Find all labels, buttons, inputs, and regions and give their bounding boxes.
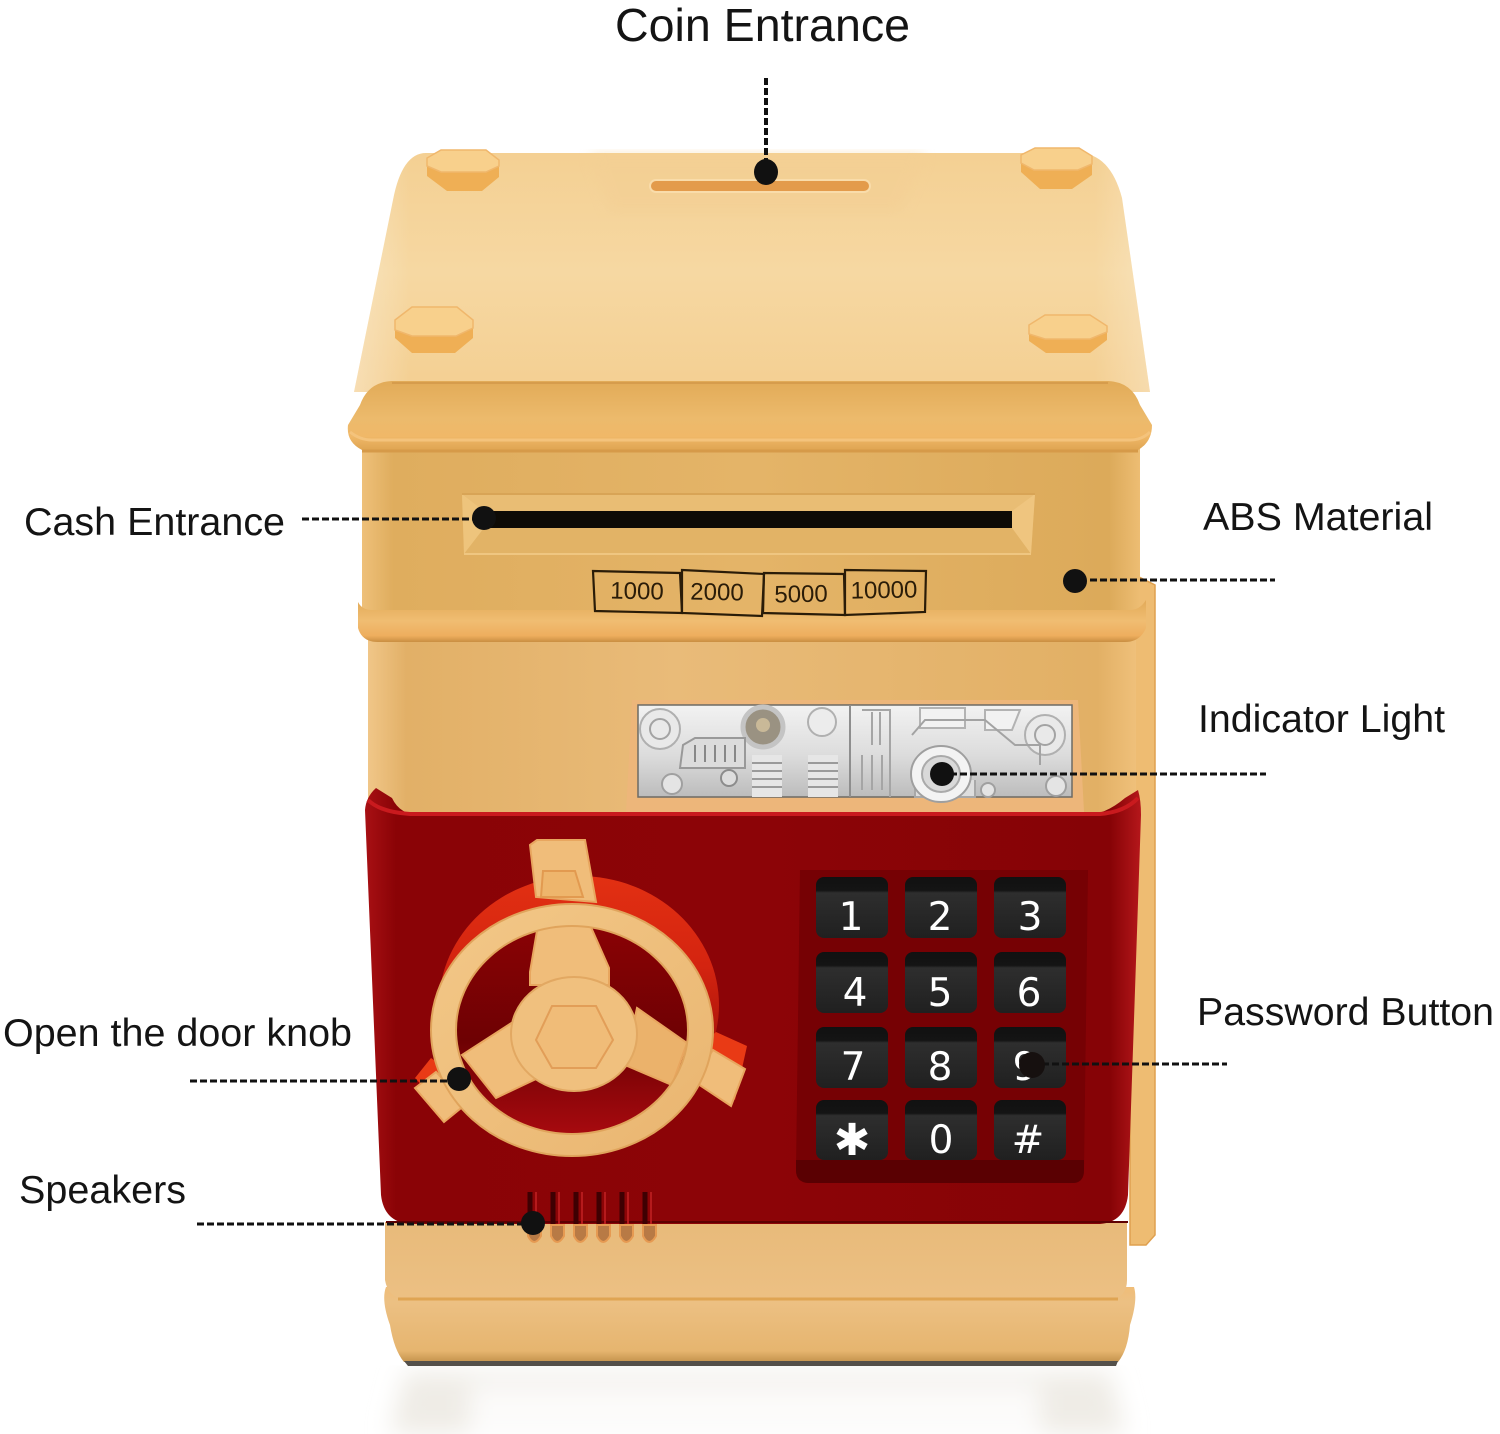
red door panel: [365, 788, 1141, 1224]
bolt top left: [427, 150, 499, 191]
upper gold body: [362, 445, 1140, 610]
label: Cash Entrance: [24, 501, 496, 544]
side door edge: [1130, 575, 1155, 1245]
coin bank product: [348, 148, 1155, 1366]
leader: Speakers: [197, 1222, 525, 1226]
banknote denomination labels: 10000: [850, 576, 918, 605]
silver mechanism detail: [640, 705, 1066, 802]
keys row one: 2: [928, 895, 952, 940]
label: ABS Material: ABS Material: [1203, 496, 1433, 539]
label: Coin Entrance: Coin Entrance: [615, 0, 910, 51]
label: Cash Entrance: Cash Entrance: [24, 501, 285, 544]
seam band: [358, 600, 1146, 642]
base plate: [384, 1287, 1135, 1366]
marker: Coin Entrance: [754, 159, 778, 185]
label: Indicator Light: Indicator Light: [1198, 698, 1445, 741]
keys row three: [816, 1027, 1066, 1090]
leader: ABS Material: [1090, 578, 1275, 582]
base body: [385, 1222, 1127, 1299]
banknote denomination labels: 2000: [690, 579, 744, 606]
marker: Cash Entrance: [472, 506, 496, 530]
keys row one: 3: [1018, 895, 1042, 940]
marker: Indicator Light: [930, 762, 954, 786]
keypad recess: [796, 870, 1088, 1183]
cash slot bezel: [462, 494, 1035, 554]
leader: Cash Entrance: [302, 518, 474, 520]
door knob: [415, 840, 747, 1156]
bolt bottom right: [1029, 315, 1107, 353]
keypad: [796, 870, 1088, 1183]
marker: ABS Material: [1063, 569, 1087, 593]
label: Open the door knob: [3, 1012, 471, 1091]
leader: Coin Entrance: [764, 78, 768, 170]
speaker vents: [528, 1192, 656, 1242]
knob outer tabs: [415, 1032, 747, 1122]
knob inner recess: [452, 924, 692, 1136]
label: Speakers: Speakers: [19, 1169, 186, 1212]
lower gold body: [368, 636, 1136, 836]
label: Coin Entrance: [615, 0, 910, 185]
keys row three: 8: [928, 1045, 952, 1090]
leader: Open the door knob: [190, 1080, 450, 1082]
keys row one: [816, 877, 1066, 940]
indicator panel: [626, 700, 1084, 812]
coin slot: [650, 180, 870, 192]
keys row four: #: [1012, 1118, 1044, 1163]
bolt top right: [1021, 148, 1092, 189]
keys row four: ✱: [834, 1115, 870, 1166]
keys row two: 5: [928, 971, 952, 1016]
banknote denomination labels: [593, 570, 926, 616]
label: Speakers: [19, 1169, 545, 1235]
keys row four: 0: [929, 1118, 953, 1163]
keys row four: [816, 1100, 1066, 1166]
leader: Indicator Light: [950, 772, 1266, 776]
keys row three: 7: [841, 1045, 865, 1090]
banknote denomination labels: 1000: [610, 578, 664, 605]
bolt bottom left: [395, 307, 473, 353]
label: ABS Material: [1063, 496, 1433, 593]
floor reflection: [390, 1372, 1125, 1434]
knob hub: [511, 977, 637, 1091]
keys row two: [816, 952, 1066, 1016]
label: Password Button: Password Button: [1197, 991, 1494, 1034]
knob spokes: [462, 840, 687, 1098]
marker: Password Button: [1019, 1052, 1045, 1078]
lid front band: [348, 381, 1152, 451]
label: Indicator Light: [930, 698, 1445, 786]
keys row one: 1: [839, 895, 863, 940]
banknote denomination labels: 5000: [774, 581, 828, 608]
keys row two: 4: [843, 971, 867, 1016]
label: Password Button: [1019, 991, 1494, 1078]
knob red cylinder: [439, 876, 719, 1134]
knob hex bolt: [536, 1006, 613, 1068]
label: Open the door knob: Open the door knob: [3, 1012, 352, 1055]
marker: Speakers: [521, 1211, 545, 1235]
lid top: [354, 153, 1150, 392]
keys row two: 6: [1017, 971, 1041, 1016]
knob ring: [431, 904, 713, 1156]
marker: Open the door knob: [447, 1067, 471, 1091]
leader: Password Button: [1042, 1062, 1227, 1066]
cash slot opening: [484, 511, 1012, 528]
keys row three: 9: [1013, 1045, 1037, 1090]
